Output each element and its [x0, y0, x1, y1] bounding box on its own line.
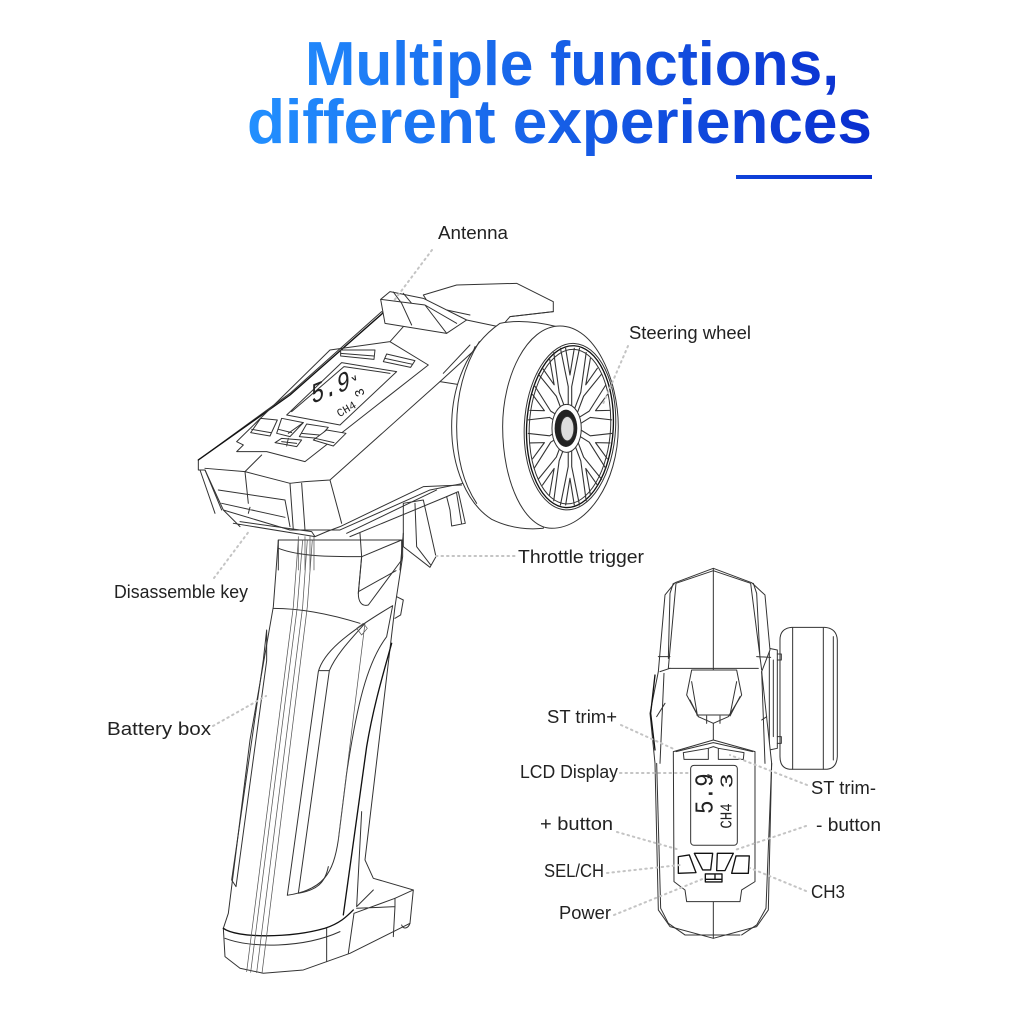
- body shell: [198, 312, 498, 530]
- top view controller illustration: [650, 568, 837, 938]
- rear hump: [423, 283, 553, 340]
- hub: [552, 404, 581, 452]
- labels: Battery box: [107, 719, 211, 739]
- body outline: [650, 568, 772, 938]
- labels: Power: [559, 903, 611, 923]
- front buttons: [251, 418, 346, 446]
- title underline: [736, 175, 872, 179]
- labels: [107, 223, 881, 923]
- grip and base: [223, 540, 413, 973]
- top view power switch: [705, 874, 722, 882]
- antenna top: [687, 670, 742, 723]
- main controller illustration: [198, 283, 620, 973]
- title: [247, 30, 872, 157]
- title: different experiences: [247, 88, 872, 157]
- panel: [673, 740, 755, 902]
- trigger: [403, 500, 436, 567]
- vent slot: [218, 485, 462, 537]
- steering wheel tyre: [452, 322, 557, 529]
- labels: + button: [540, 814, 613, 834]
- top trim buttons: [341, 350, 415, 367]
- labels: Antenna: [438, 223, 509, 243]
- LCD display: [287, 363, 397, 425]
- labels: LCD Display: [520, 762, 618, 782]
- top view buttons: [678, 853, 749, 873]
- top view LCD: 5.9: [691, 773, 721, 814]
- top view LCD: [691, 765, 739, 845]
- labels: Disassemble key: [114, 582, 248, 602]
- top view LCD: v: [706, 774, 715, 779]
- top view LCD: CH4: [719, 803, 738, 829]
- LCD display: v: [350, 373, 360, 384]
- antenna block: [381, 292, 467, 333]
- labels: Throttle trigger: [518, 547, 644, 567]
- labels: SEL/CH: [544, 861, 604, 881]
- title: Multiple functions,: [305, 30, 839, 99]
- power switch: [275, 438, 302, 447]
- labels: - button: [816, 815, 881, 835]
- labels: ST trim+: [547, 707, 617, 727]
- labels: Steering wheel: [629, 323, 751, 343]
- labels: ST trim-: [811, 778, 876, 798]
- leader lines: [213, 250, 807, 915]
- labels: CH3: [811, 882, 845, 902]
- top view trim buttons: [683, 747, 744, 759]
- LCD display: 3: [353, 386, 370, 398]
- top view LCD: 3: [717, 773, 739, 789]
- LCD display: CH4: [335, 400, 359, 421]
- wheel side view: [780, 627, 837, 769]
- wheel rim: [520, 341, 620, 512]
- body, trigger and steering wheel: [198, 283, 620, 570]
- control panel: [237, 327, 428, 462]
- neck: [278, 533, 403, 570]
- LCD display: 5.9: [311, 366, 351, 413]
